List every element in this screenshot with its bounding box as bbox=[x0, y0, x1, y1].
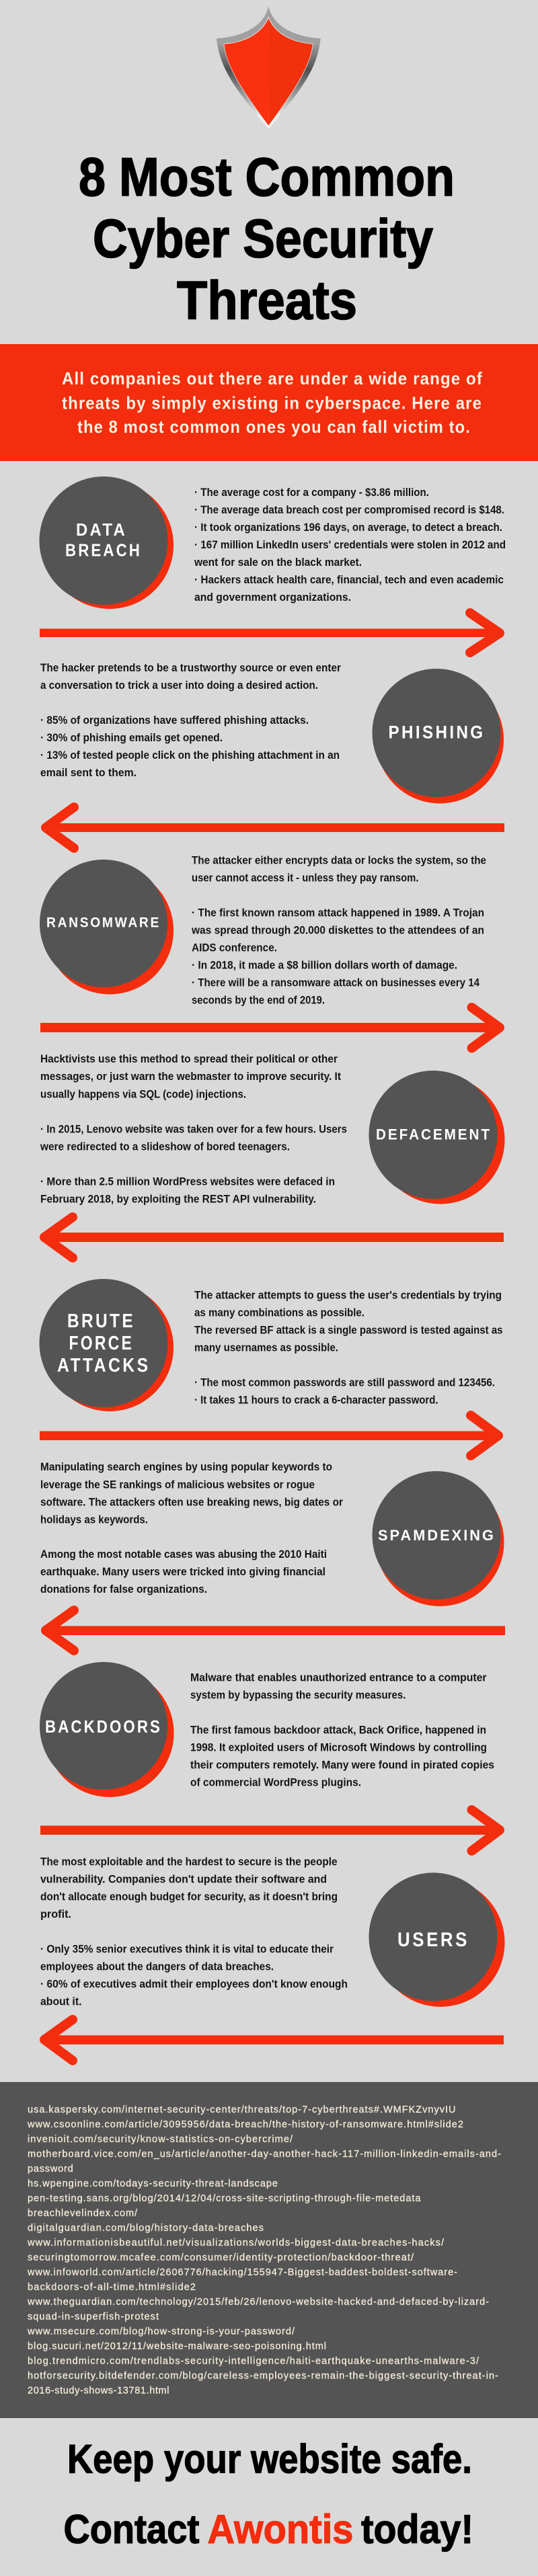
text: users facts: The most exploitable and the hardest to secure is the people bbox=[40, 1855, 338, 1868]
title: Cyber Security bbox=[93, 208, 433, 269]
panel: intro banner: All companies out there are under a wide range of bbox=[62, 368, 483, 388]
text: brute force facts: many usernames as possible. bbox=[194, 1341, 338, 1354]
arrow: right 1 bbox=[40, 613, 500, 653]
text: users facts: employees about the dangers of data breaches. bbox=[40, 1960, 274, 1973]
text: spamdexing facts: holidays as keywords. bbox=[40, 1513, 148, 1526]
text: data breach facts: · The average cost for a company - $3.86 million. bbox=[194, 486, 429, 499]
arrow: left 4 bbox=[44, 1217, 504, 1258]
badge: brute force attacks bbox=[39, 1279, 174, 1411]
text: users facts: · 60% of executives admit their employees don't know enough bbox=[40, 1977, 348, 1991]
panel: sources: breachlevelindex.com/ bbox=[28, 2208, 138, 2218]
text: phishing facts: · 30% of phishing emails get opened. bbox=[40, 731, 223, 744]
text: backdoors facts: system by bypassing the security measures. bbox=[190, 1688, 406, 1702]
panel: sources: motherboard.vice.com/en_us/article/another-day-another-hack-117-million-linkedin-emails-and- bbox=[28, 2149, 501, 2159]
icon: shield bbox=[217, 6, 321, 129]
text: defacement facts: Hacktivists use this method to spread their political or other bbox=[40, 1052, 338, 1065]
panel: sources: www.informationisbeautiful.net/visualizations/worlds-biggest-data-breaches-hacks/ bbox=[27, 2237, 445, 2248]
text: spamdexing facts: leverage the SE rankings of malicious websites or rogue bbox=[40, 1479, 315, 1491]
panel: sources: securingtomorrow.mcafee.com/consumer/identity-protection/backdoor-threat/ bbox=[28, 2252, 414, 2263]
panel: sources: pen-testing.sans.org/blog/2014/12/04/cross-site-scripting-through-file-metedata bbox=[28, 2193, 421, 2204]
panel: users bbox=[40, 1855, 504, 2008]
text: data breach facts bbox=[194, 486, 506, 604]
panel: sources: digitalguardian.com/blog/history-data-breaches bbox=[28, 2222, 264, 2233]
text: ransomware facts: seconds by the end of 2019. bbox=[192, 993, 325, 1007]
arrow: left 2 bbox=[46, 807, 504, 848]
text: backdoors facts: their computers remotely. Many were found in pirated copies bbox=[190, 1758, 494, 1772]
badge: brute force attacks: BRUTE bbox=[67, 1311, 135, 1332]
panel: sources: invenioit.com/security/know-statistics-on-cybercrime/ bbox=[28, 2134, 293, 2145]
text: data breach facts: and government organizations. bbox=[194, 591, 351, 604]
arrow: right 5 bbox=[40, 1415, 498, 1456]
text: spamdexing facts: donations for false organizations. bbox=[40, 1583, 207, 1595]
text: brute force facts: as many combinations as possible. bbox=[194, 1306, 364, 1319]
text: ransomware facts: · In 2018, it made a $8 billion dollars worth of damage. bbox=[192, 958, 457, 972]
text: brute force facts: The reversed BF attack is a single password is tested against as bbox=[194, 1324, 503, 1336]
arrow: right 3 bbox=[40, 1007, 500, 1048]
call to action: Keep your website safe. bbox=[67, 2437, 472, 2481]
arrow: left 6 bbox=[46, 1610, 505, 1651]
text: data breach facts: · 167 million LinkedIn users' credentials were stolen in 2012 and bbox=[194, 538, 506, 551]
panel: data breach bbox=[39, 476, 506, 609]
text: data breach facts: · Hackers attack health care, financial, tech and even academic bbox=[194, 573, 504, 586]
text: defacement facts: usually happens via SQL (code) injections. bbox=[40, 1087, 246, 1101]
title: 8 Most Common bbox=[79, 147, 455, 208]
badge: defacement bbox=[369, 1071, 504, 1204]
badge: brute force attacks: ATTACKS bbox=[57, 1355, 151, 1376]
badge: defacement: DEFACEMENT bbox=[376, 1126, 492, 1142]
panel: intro banner: the 8 most common ones you can fall victim to. bbox=[77, 417, 471, 437]
text: ransomware facts: AIDS conference. bbox=[192, 941, 277, 954]
badge: ransomware: RANSOMWARE bbox=[46, 915, 161, 930]
badge: spamdexing bbox=[373, 1471, 504, 1606]
panel: sources: blog.trendmicro.com/trendlabs-security-intelligence/haiti-earthquake-unearths-malware-3/ bbox=[28, 2356, 479, 2366]
badge: backdoors bbox=[40, 1662, 174, 1797]
text: spamdexing facts: earthquake. Many users were tricked into giving financial bbox=[40, 1565, 325, 1578]
text: ransomware facts: · There will be a ransomware attack on businesses every 14 bbox=[192, 976, 479, 989]
text: defacement facts bbox=[40, 1052, 347, 1206]
text: data breach facts: went for sale on the black market. bbox=[194, 556, 362, 569]
text: ransomware facts: · The first known ransom attack happened in 1989. A Trojan bbox=[192, 906, 484, 919]
panel: spamdexing bbox=[40, 1460, 504, 1606]
panel: intro banner: threats by simply existing in cyberspace. Here are bbox=[62, 392, 482, 413]
panel: sources: 2016-study-shows-13781.html bbox=[28, 2385, 169, 2396]
badge: data breach bbox=[39, 476, 174, 609]
badge: spamdexing: SPAMDEXING bbox=[378, 1527, 496, 1544]
text: data breach facts: · It took organizations 196 days, on average, to detect a breach. bbox=[194, 521, 502, 534]
text: ransomware facts: was spread through 20.000 diskettes to the attendees of an bbox=[191, 923, 484, 937]
text: phishing facts: The hacker pretends to be a trustworthy source or even enter bbox=[40, 661, 341, 674]
text: defacement facts: · More than 2.5 million WordPress websites were defaced in bbox=[40, 1175, 335, 1188]
text: users facts bbox=[40, 1855, 348, 2008]
text: users facts: · Only 35% senior executives think it is vital to educate their bbox=[40, 1942, 334, 1956]
panel: brute force attacks bbox=[39, 1279, 503, 1411]
panel: ransomware bbox=[40, 854, 486, 1007]
title: Threats bbox=[177, 270, 357, 331]
title bbox=[79, 147, 455, 331]
text: backdoors facts: Malware that enables unauthorized entrance to a computer bbox=[190, 1671, 487, 1684]
text: users facts: vulnerability. Companies don't update their software and bbox=[40, 1872, 327, 1886]
text: data breach facts: · The average data breach cost per compromised record is $148. bbox=[194, 503, 504, 516]
panel: sources: www.msecure.com/blog/how-strong-is-your-password/ bbox=[27, 2326, 295, 2337]
text: ransomware facts: user cannot access it - unless they pay ransom. bbox=[192, 871, 418, 884]
text: brute force facts: · It takes 11 hours to crack a 6-character password. bbox=[194, 1394, 438, 1406]
badge: users: USERS bbox=[397, 1929, 469, 1951]
panel: sources: blog.sucuri.net/2012/11/website-malware-seo-poisoning.html bbox=[28, 2341, 326, 2352]
arrow: left 8 bbox=[44, 2020, 504, 2061]
text: backdoors facts bbox=[190, 1671, 494, 1789]
text: brute force facts bbox=[194, 1289, 503, 1406]
call to action: Awontis bbox=[207, 2507, 354, 2552]
text: backdoors facts: of commercial WordPress plugins. bbox=[190, 1776, 361, 1789]
text: spamdexing facts: Manipulating search engines by using popular keywords to bbox=[40, 1460, 332, 1473]
arrow: right 7 bbox=[40, 1810, 500, 1851]
panel: defacement bbox=[40, 1052, 505, 1206]
call to action: Contact bbox=[63, 2507, 200, 2552]
panel: phishing bbox=[40, 661, 504, 804]
panel: sources: www.theguardian.com/technology/2015/feb/26/lenovo-website-hacked-and-defaced-by-lizard- bbox=[27, 2296, 489, 2307]
badge: data breach: BREACH bbox=[65, 540, 142, 560]
text: defacement facts: were redirected to a slideshow of bored teenagers. bbox=[40, 1140, 290, 1153]
text: spamdexing facts: software. The attackers often use breaking news, big dates or bbox=[40, 1496, 343, 1508]
text: defacement facts: · In 2015, Lenovo website was taken over for a few hours. Users bbox=[40, 1122, 347, 1136]
badge: ransomware bbox=[40, 860, 174, 995]
text: phishing facts bbox=[40, 661, 341, 779]
panel: sources bbox=[0, 2082, 538, 2418]
panel: sources: www.csoonline.com/article/3095956/data-breach/the-history-of-ransomware.html#slide2 bbox=[27, 2119, 463, 2130]
text: phishing facts: email sent to them. bbox=[40, 766, 137, 779]
badge: backdoors: BACKDOORS bbox=[45, 1716, 162, 1737]
text: phishing facts: · 13% of tested people click on the phishing attachment in an bbox=[40, 749, 340, 761]
text: phishing facts: a conversation to trick a user into doing a desired action. bbox=[40, 679, 318, 692]
panel: sources: backdoors-of-all-time.html#slide2 bbox=[28, 2282, 196, 2292]
panel: sources: password bbox=[28, 2163, 73, 2174]
badge: phishing bbox=[373, 669, 504, 804]
text: backdoors facts: 1998. It exploited users of Microsoft Windows by controlling bbox=[190, 1741, 487, 1754]
text: backdoors facts: The first famous backdoor attack, Back Orifice, happened in bbox=[190, 1723, 486, 1737]
text: defacement facts: February 2018, by exploiting the REST API vulnerability. bbox=[40, 1192, 316, 1206]
panel: sources: hs.wpengine.com/todays-security-threat-landscape bbox=[28, 2178, 278, 2189]
panel: sources: hotforsecurity.bitdefender.com/blog/careless-employees-remain-the-biggest-security-threat-in- bbox=[28, 2370, 498, 2381]
text: brute force facts: · The most common passwords are still password and 123456. bbox=[194, 1376, 495, 1388]
badge: users bbox=[369, 1872, 504, 2007]
text: users facts: about it. bbox=[40, 1995, 82, 2008]
text: spamdexing facts bbox=[40, 1460, 343, 1595]
panel: intro banner bbox=[0, 344, 538, 461]
text: ransomware facts: The attacker either encrypts data or locks the system, so the bbox=[192, 854, 486, 867]
text: brute force facts: The attacker attempts to guess the user's credentials by trying bbox=[194, 1289, 502, 1301]
panel: sources: www.infoworld.com/article/2606776/hacking/155947-Biggest-baddest-boldest-software- bbox=[27, 2267, 457, 2278]
text: defacement facts: messages, or just warn the webmaster to improve security. It bbox=[40, 1070, 341, 1083]
panel: backdoors bbox=[40, 1662, 494, 1797]
badge: brute force attacks: FORCE bbox=[69, 1333, 134, 1354]
panel: sources: usa.kaspersky.com/internet-security-center/threats/top-7-cyberthreats#.WMFKZvnyvIU bbox=[28, 2104, 456, 2115]
text: users facts: profit. bbox=[40, 1907, 71, 1921]
call to action bbox=[63, 2437, 473, 2552]
text: ransomware facts bbox=[191, 854, 486, 1007]
text: users facts: don't allocate enough budget for security, as it doesn't bring bbox=[40, 1890, 338, 1903]
text: phishing facts: · 85% of organizations have suffered phishing attacks. bbox=[40, 714, 309, 726]
panel: sources: squad-in-superfish-protest bbox=[28, 2311, 159, 2322]
call to action: today! bbox=[361, 2507, 473, 2552]
badge: data breach: DATA bbox=[76, 520, 127, 540]
badge: phishing: PHISHING bbox=[389, 722, 486, 742]
text: spamdexing facts: Among the most notable cases was abusing the 2010 Haiti bbox=[40, 1548, 327, 1561]
